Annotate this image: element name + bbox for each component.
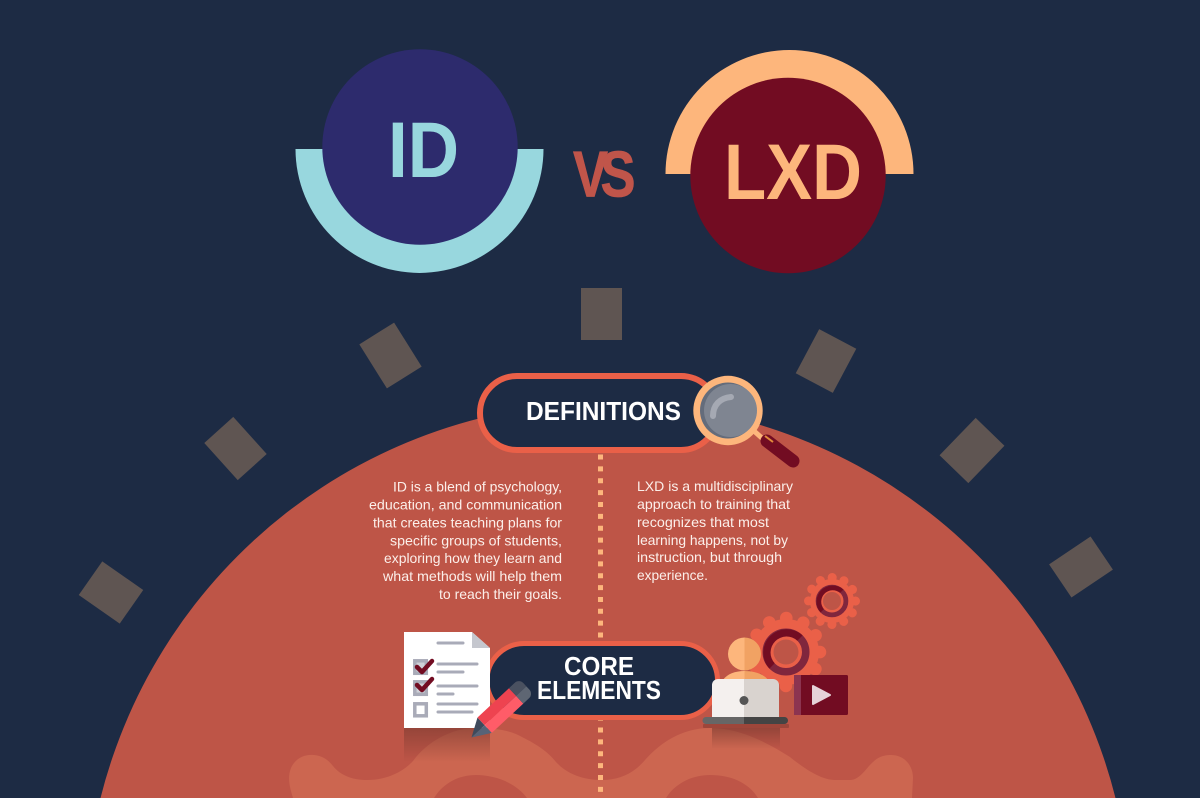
VS label — [573, 138, 636, 210]
text block: LXD definition: approach to training that — [637, 497, 790, 512]
text block: ID definition: ID is a blend of psychology, — [393, 480, 562, 494]
ID badge: ID — [388, 105, 459, 194]
text block: ID definition: what methods will help them — [382, 569, 562, 584]
text block: LXD definition: learning happens, not by — [637, 533, 788, 548]
dark humps in wave — [434, 775, 758, 798]
text block: LXD definition — [637, 479, 793, 583]
dotted center divider — [598, 454, 603, 798]
text block: ID definition: exploring how they learn and — [384, 551, 562, 566]
core elements pill: CORE — [564, 651, 634, 681]
text block: LXD definition: recognizes that most — [637, 515, 769, 530]
icon: gears — [752, 578, 856, 686]
core elements pill — [487, 644, 718, 718]
text block: ID definition: specific groups of students, — [390, 534, 562, 548]
VS label: S — [600, 138, 636, 210]
text block: ID definition: to reach their goals. — [439, 587, 562, 602]
text block: ID definition — [369, 480, 562, 602]
icon: person at laptop — [702, 638, 789, 749]
core elements pill: ELEMENTS — [537, 675, 661, 705]
definitions pill: DEFINITIONS — [526, 398, 681, 426]
ID badge — [296, 49, 544, 273]
text block: ID definition: that creates teaching plans for — [373, 516, 562, 530]
icon: magnifying glass — [693, 376, 793, 461]
icon: video player — [794, 675, 848, 715]
icon: pencil — [464, 679, 534, 745]
text block: LXD definition: instruction, but through — [637, 550, 782, 565]
decorative radiating squares — [79, 288, 1113, 624]
LXD badge: LXD — [724, 127, 862, 216]
text block: LXD definition: LXD is a multidisciplinary — [637, 479, 793, 494]
LXD badge — [666, 50, 914, 273]
VS label: V — [573, 138, 608, 210]
wave shape at bottom — [289, 728, 913, 798]
icon: checklist document — [404, 632, 490, 762]
text block: LXD definition: experience. — [637, 568, 708, 583]
large semicircle background — [100, 402, 1116, 798]
text block: ID definition: education, and communication — [369, 498, 562, 512]
definitions pill — [480, 376, 718, 450]
